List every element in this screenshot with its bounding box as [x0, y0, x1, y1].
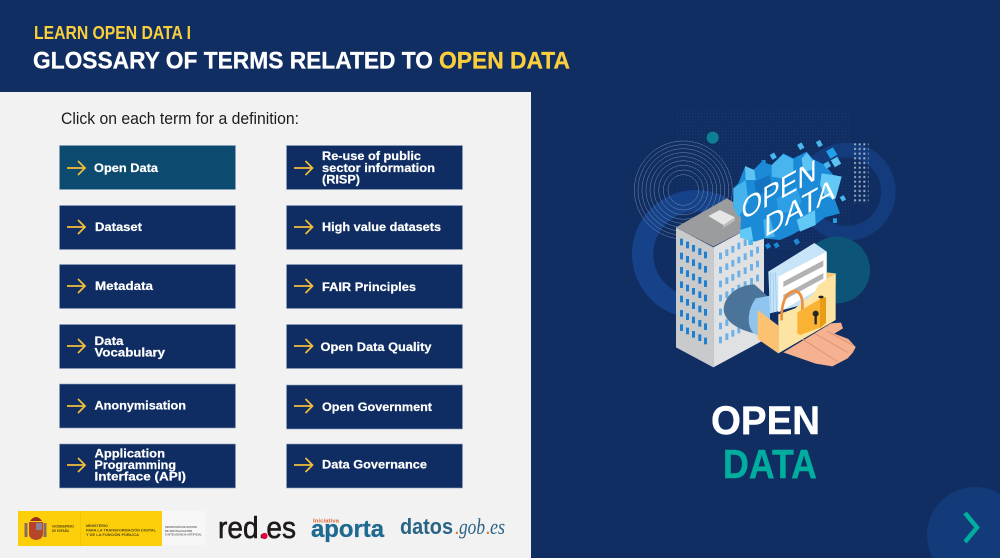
button: Open Government	[286, 385, 462, 429]
logo: Gobierno de España: E INTELIGENCIA ARTIFICIAL	[165, 532, 202, 536]
logo: Gobierno de España: DE DIGITALIZACIÓN	[165, 528, 192, 533]
button: Open Data	[60, 146, 236, 190]
button: High value datasets	[286, 206, 462, 250]
button: Dataset	[60, 206, 236, 250]
button: Application Programming Interface: Application	[94, 448, 165, 460]
instruction text: Click on each term for a definition:	[61, 110, 299, 128]
logo: Gobierno de España	[18, 511, 205, 546]
button: Data Vocabulary: Vocabulary	[94, 348, 166, 360]
button: Re-use of public sector information	[286, 146, 462, 190]
button: Application Programming Interface	[60, 444, 236, 488]
logo: Gobierno de España: SECRETARÍA DE ESTADO	[165, 524, 198, 529]
title: OPEN DATA	[439, 48, 570, 74]
logo: Gobierno de España: DE ESPAÑA	[52, 528, 69, 533]
logo: datos.gob.es: .	[485, 516, 491, 539]
button: Data Governance	[286, 444, 462, 488]
hand holding folder	[724, 243, 856, 366]
concentric rings	[634, 141, 732, 239]
button: Data Vocabulary: Data	[94, 336, 124, 348]
button: Re-use of public sector information: sector information	[322, 163, 435, 175]
eyebrow heading: LEARN OPEN DATA I	[34, 23, 191, 43]
button: Metadata: Metadata	[95, 281, 154, 293]
sleeve	[724, 284, 770, 334]
logo: datos.gob.es	[400, 514, 505, 539]
logo: datos.gob.es: datos	[400, 514, 453, 539]
next button	[927, 487, 1000, 558]
big heading: open data	[711, 399, 820, 487]
button: Metadata	[60, 264, 236, 308]
button: Data Vocabulary	[60, 324, 236, 368]
button: Anonymisation: Anonymisation	[94, 400, 186, 412]
button: FAIR Principles: FAIR Principles	[322, 282, 416, 294]
logo: Iniciativa aporta: aporta	[311, 516, 385, 543]
logo: Gobierno de España: GOBIERNO	[52, 524, 74, 528]
folder	[827, 272, 836, 285]
logo: datos.gob.es: es	[490, 514, 505, 539]
illustration: open data building and folder	[634, 110, 888, 367]
button: Application Programming Interface: Programming	[94, 460, 176, 472]
hand	[783, 323, 856, 366]
button: Anonymisation	[60, 384, 236, 428]
button: Open Data Quality: Open Data Quality	[320, 342, 432, 354]
button: Application Programming Interface: Interface (API)	[94, 472, 186, 484]
big heading: open data: OPEN	[711, 399, 820, 443]
small pixel squares	[748, 238, 800, 249]
button: Data Governance: Data Governance	[322, 460, 427, 472]
header	[33, 23, 570, 74]
logo: datos.gob.es: gob	[459, 514, 485, 539]
pixel cloud with open data lettering: OPEN	[742, 152, 817, 227]
panel: glossary terms	[0, 92, 531, 558]
button: Open Data: Open Data	[94, 163, 159, 175]
pixel cloud with open data lettering	[733, 140, 846, 244]
building	[676, 198, 764, 367]
button: Re-use of public sector information: Re-use of public	[322, 151, 422, 163]
button: Open Government: Open Government	[322, 402, 432, 414]
logo: Gobierno de España: MINISTERIO	[86, 524, 108, 528]
button: Re-use of public sector information: (RISP)	[322, 174, 360, 186]
icon: chevron	[965, 513, 977, 542]
button: High value datasets: High value datasets	[322, 222, 441, 234]
button: Dataset: Dataset	[95, 222, 142, 234]
logo: Iniciativa aporta: Iniciativa	[313, 518, 339, 524]
icon: coat of arms	[24, 517, 46, 540]
logo: red.es: red.es	[218, 510, 296, 545]
button: FAIR Principles	[286, 264, 462, 308]
title: GLOSSARY OF TERMS RELATED TO	[33, 48, 433, 74]
logo: datos.gob.es: .	[454, 516, 460, 539]
documents	[768, 243, 827, 313]
logo: Gobierno de España: PARA LA TRANSFORMACIÓN DIGITAL	[86, 528, 157, 532]
button: Open Data Quality	[286, 324, 462, 368]
padlock	[782, 291, 803, 320]
background shapes	[634, 110, 888, 367]
pixel cloud with open data lettering: DATA	[764, 171, 835, 244]
logo: Gobierno de España: Y DE LA FUNCIÓN PÚBLICA	[86, 532, 139, 537]
big heading: open data: DATA	[723, 441, 817, 487]
